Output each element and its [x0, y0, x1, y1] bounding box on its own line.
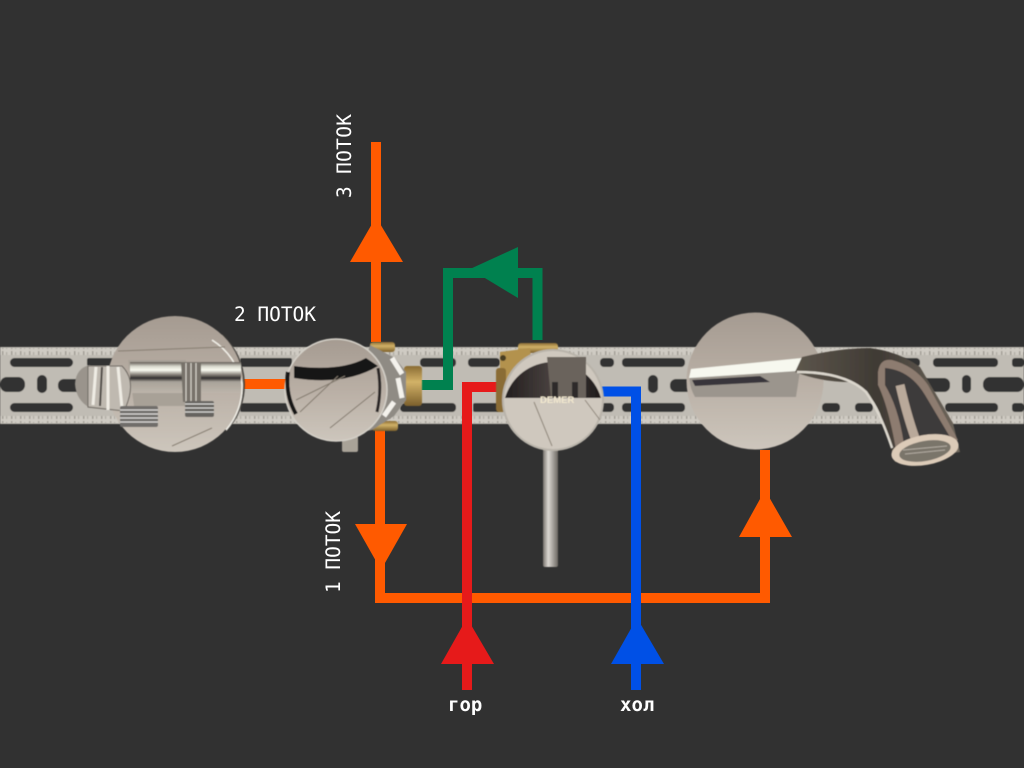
- handshower outlet: [75, 316, 245, 452]
- lever: [543, 448, 558, 567]
- orange pipe: 1 поток to spout: [355, 430, 792, 598]
- orange pipe: 2 поток link: [243, 379, 286, 389]
- mixer valve with lever: [496, 343, 603, 567]
- green recirculation pipe with arrow: [420, 247, 538, 385]
- wall spout: [686, 312, 961, 471]
- spout arm: [795, 348, 960, 462]
- threaded nipples: [120, 406, 158, 427]
- shadow of holder: [75, 365, 90, 408]
- hose holder: [88, 366, 131, 411]
- mounting rail: [0, 347, 1024, 424]
- wall connector body: [128, 360, 186, 406]
- diverter valve: [285, 339, 422, 452]
- label: cold water: хол: [620, 694, 654, 716]
- brand mark: DEMER: [540, 395, 574, 406]
- blue cold supply pipe with arrow: [600, 392, 664, 690]
- label: hot water: гор: [448, 694, 482, 716]
- spout tip: [878, 360, 958, 462]
- orange pipe: 3 поток with arrow: [350, 142, 403, 342]
- aerator: [889, 429, 961, 471]
- label: 3 поток: 3 ПОТОК: [333, 114, 356, 198]
- label: 2 поток: 2 ПОТОК: [234, 303, 316, 326]
- label: 1 поток: 1 ПОТОК: [322, 511, 345, 593]
- red hot supply pipe with arrow: [441, 387, 497, 690]
